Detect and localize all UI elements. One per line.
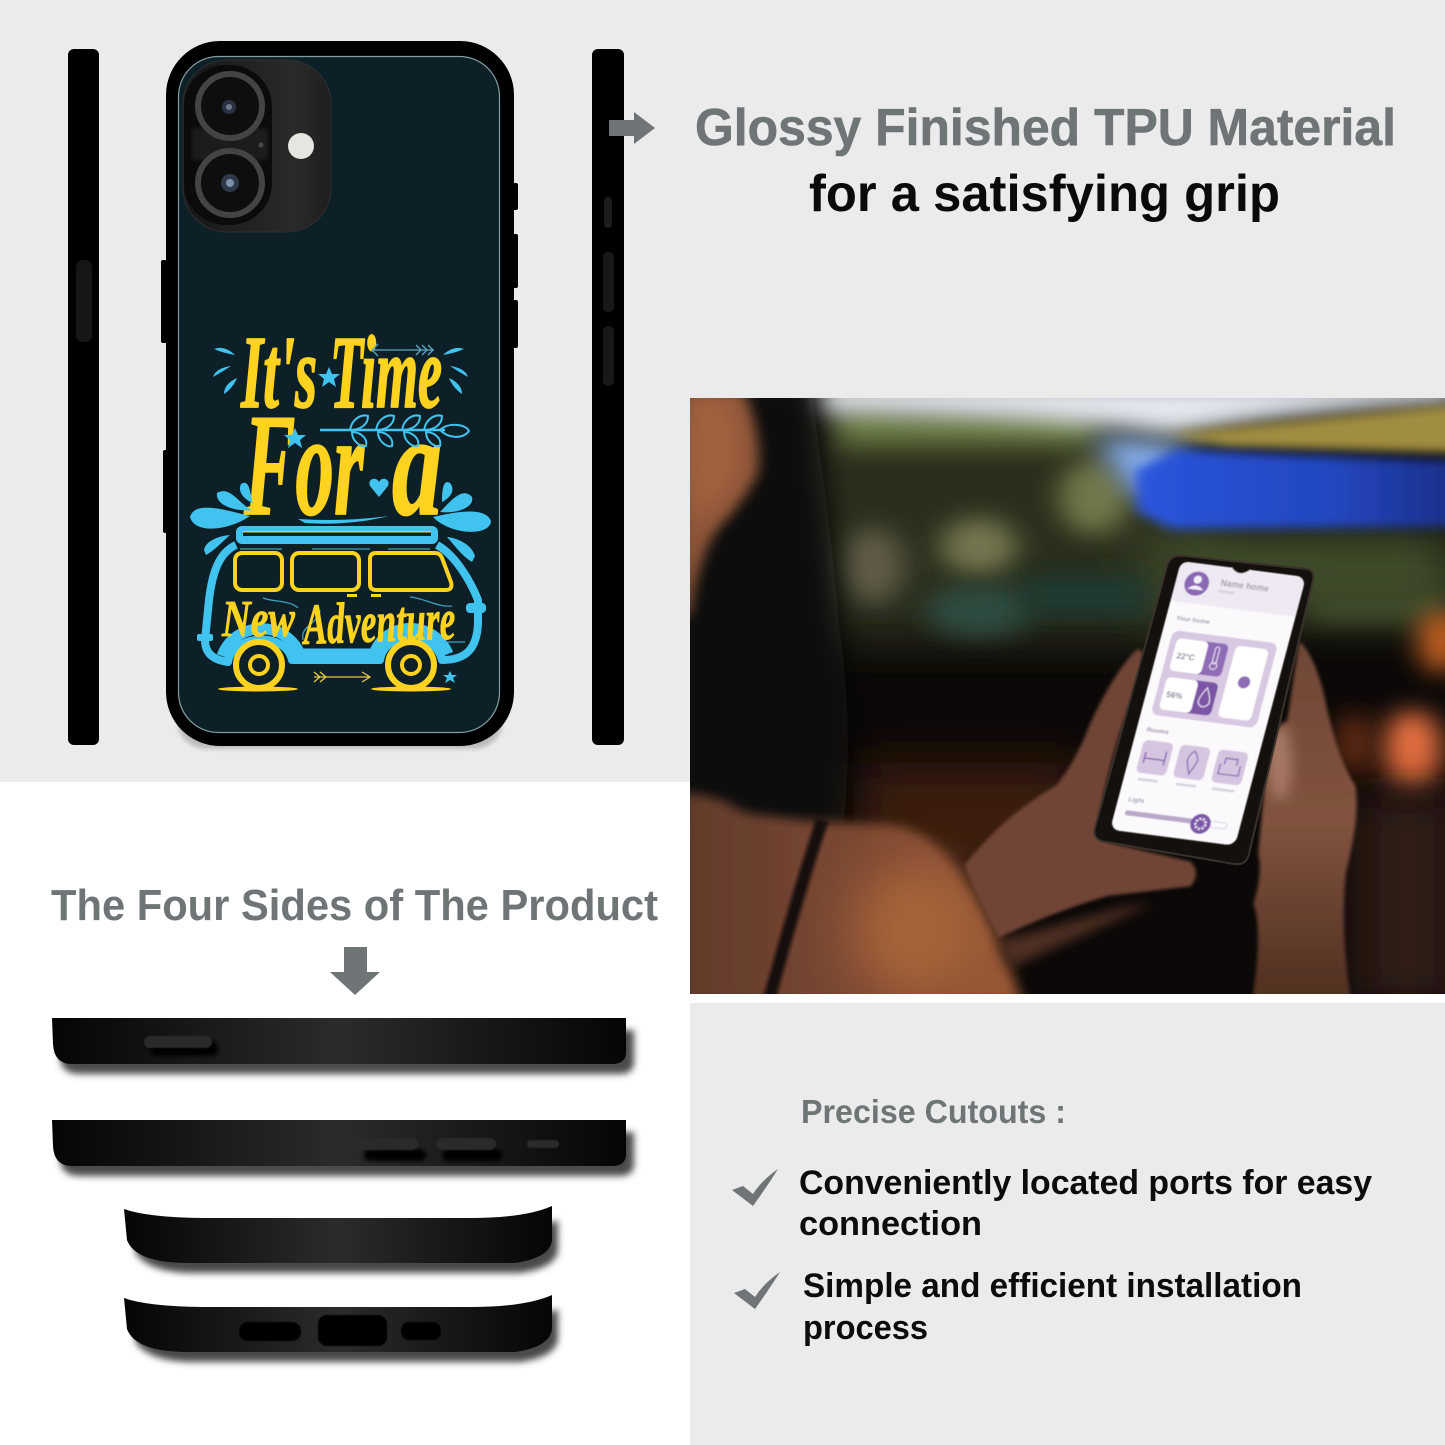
side view: left edge with one button — [52, 1018, 634, 1074]
home card — [1151, 630, 1278, 728]
app screen: Light — [1127, 796, 1146, 805]
heading lettering: Time — [330, 315, 442, 430]
app screen: Rooms — [1146, 727, 1170, 736]
decorations — [190, 348, 491, 683]
woman's head and hair — [680, 387, 848, 824]
smartphone in photo — [1094, 556, 1313, 864]
text block: installation benefit — [803, 1267, 1302, 1347]
text block: ports benefit — [799, 1164, 1372, 1243]
light slider — [1124, 810, 1228, 834]
side view: right edge with buttons — [52, 1120, 634, 1176]
heading lettering — [240, 315, 442, 546]
artwork: It's Time For a New Adventure — [190, 315, 491, 692]
panel: precise cutouts background — [690, 1003, 1445, 1445]
blurred background lights — [786, 383, 1445, 1006]
icon: check mark one — [732, 1169, 778, 1206]
panel: right side view of case — [592, 49, 624, 745]
heading: glossy finished material: Glossy Finished TPU Material — [695, 99, 1396, 157]
text block: ports benefit: connection — [799, 1205, 982, 1243]
woman's hands — [964, 641, 1357, 998]
text block: installation benefit: process — [803, 1309, 928, 1347]
side view: bottom edge with ports — [124, 1295, 558, 1362]
room tiles — [1134, 739, 1249, 793]
text block: installation benefit: Simple and efficient installation — [803, 1267, 1302, 1305]
panel: left side view of case — [68, 49, 99, 745]
side view: top edge — [124, 1206, 558, 1273]
panel: top grey background — [0, 0, 1445, 782]
photo: hands holding phone — [680, 383, 1445, 1006]
avatar — [1184, 571, 1210, 596]
heading: glossy finished material — [695, 99, 1396, 223]
app screen — [1110, 560, 1306, 846]
app screen: Your home — [1175, 615, 1211, 626]
arrow: pointing right to heading — [609, 112, 655, 144]
heading lettering: It's — [240, 315, 317, 430]
text block: ports benefit: Conveniently located ports for easy — [799, 1164, 1372, 1202]
app screen: Name home — [1219, 578, 1270, 594]
icon: check mark two — [734, 1272, 780, 1309]
heading lettering: a — [392, 384, 442, 546]
heading: glossy finished material: for a satisfying grip — [809, 165, 1280, 223]
home card: 22°C — [1175, 651, 1196, 662]
van lettering — [221, 587, 456, 657]
camera island — [183, 60, 331, 232]
woman's shoulder and strap — [680, 793, 1022, 1002]
van lettering: New — [221, 591, 295, 648]
home card: 56% — [1165, 690, 1184, 701]
heading: precise cutouts: Precise Cutouts : — [801, 1093, 1066, 1130]
leaf branch and arrows — [320, 344, 469, 446]
van body — [197, 526, 486, 692]
arrow: pointing down to side views — [330, 947, 380, 995]
heading lettering: For — [243, 384, 365, 546]
phone case back view — [161, 41, 518, 749]
heading: four sides of the product: The Four Sides of The Product — [51, 881, 658, 930]
van lettering: Adventure — [300, 587, 456, 657]
